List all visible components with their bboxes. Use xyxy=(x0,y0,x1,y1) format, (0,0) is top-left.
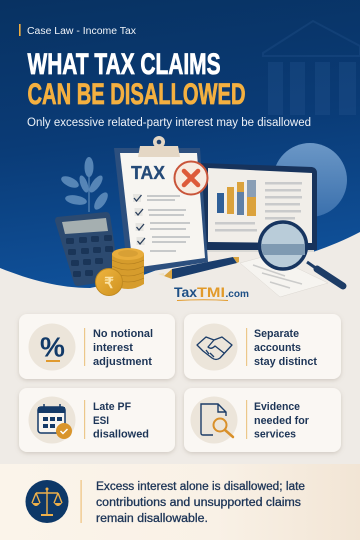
eyebrow label: Case Law - Income Tax xyxy=(27,26,136,37)
card: no notional interest xyxy=(19,314,175,379)
icon: magnifying glass xyxy=(260,222,343,286)
card text: stay distinct xyxy=(254,356,317,368)
takeaway text: remain disallowable. xyxy=(96,513,208,525)
icon: scales of justice xyxy=(26,480,68,523)
card text: services xyxy=(254,428,296,440)
illustration: coin stack xyxy=(112,248,144,289)
takeaway text: contributions and unsupported claims xyxy=(96,497,301,509)
takeaway text: Excess interest alone is disallowed; late xyxy=(96,481,305,493)
title: WHAT TAX CLAIMS xyxy=(28,48,220,81)
illustration: paper xyxy=(240,255,328,297)
card text: interest xyxy=(93,342,133,354)
clipboard clip xyxy=(138,136,180,157)
icon: percent: % xyxy=(40,332,65,362)
icon: rupee coin: ₹ xyxy=(104,275,114,292)
card text: Late PF xyxy=(93,401,131,413)
card text xyxy=(93,401,149,440)
card text: Separate xyxy=(254,328,299,340)
card text: disallowed xyxy=(93,428,149,440)
icon: calendar xyxy=(28,396,76,444)
card text xyxy=(254,328,317,368)
illustration: laptop xyxy=(200,163,317,252)
card text: No notional xyxy=(93,328,153,340)
icon: rupee coin xyxy=(96,268,122,296)
icon: handshake xyxy=(190,324,238,370)
logo: .com xyxy=(226,288,249,300)
card text xyxy=(93,328,153,368)
logo: TMI xyxy=(197,284,225,300)
bottom takeaway band xyxy=(0,464,360,540)
illustration: calculator xyxy=(55,212,119,286)
card text: ESI xyxy=(93,415,109,427)
card: separate accounts xyxy=(184,314,341,379)
card text: needed for xyxy=(254,415,310,427)
hero background xyxy=(0,0,360,288)
title xyxy=(28,48,245,111)
icon: red cross badge xyxy=(174,162,208,194)
logo: Tax xyxy=(174,284,197,300)
card text xyxy=(254,401,310,440)
title: CAN BE DISALLOWED xyxy=(28,78,245,111)
card text: adjustment xyxy=(93,356,152,368)
logo xyxy=(174,284,249,300)
icon: percent xyxy=(28,324,76,370)
takeaway text xyxy=(96,481,305,525)
icon: leaves xyxy=(59,157,110,212)
card text: accounts xyxy=(254,342,301,354)
decorative circle xyxy=(273,143,347,217)
icon: document search xyxy=(190,396,238,444)
card text: Evidence xyxy=(254,401,300,413)
clipboard heading: TAX xyxy=(131,163,165,183)
illustration: clipboard xyxy=(114,136,208,275)
icon: faint courthouse xyxy=(263,21,360,115)
card: late PF ESI xyxy=(19,388,175,452)
subtitle: Only excessive related-party interest may be disallowed xyxy=(27,117,311,129)
card: evidence xyxy=(184,388,341,452)
illustration: pen xyxy=(158,257,239,279)
